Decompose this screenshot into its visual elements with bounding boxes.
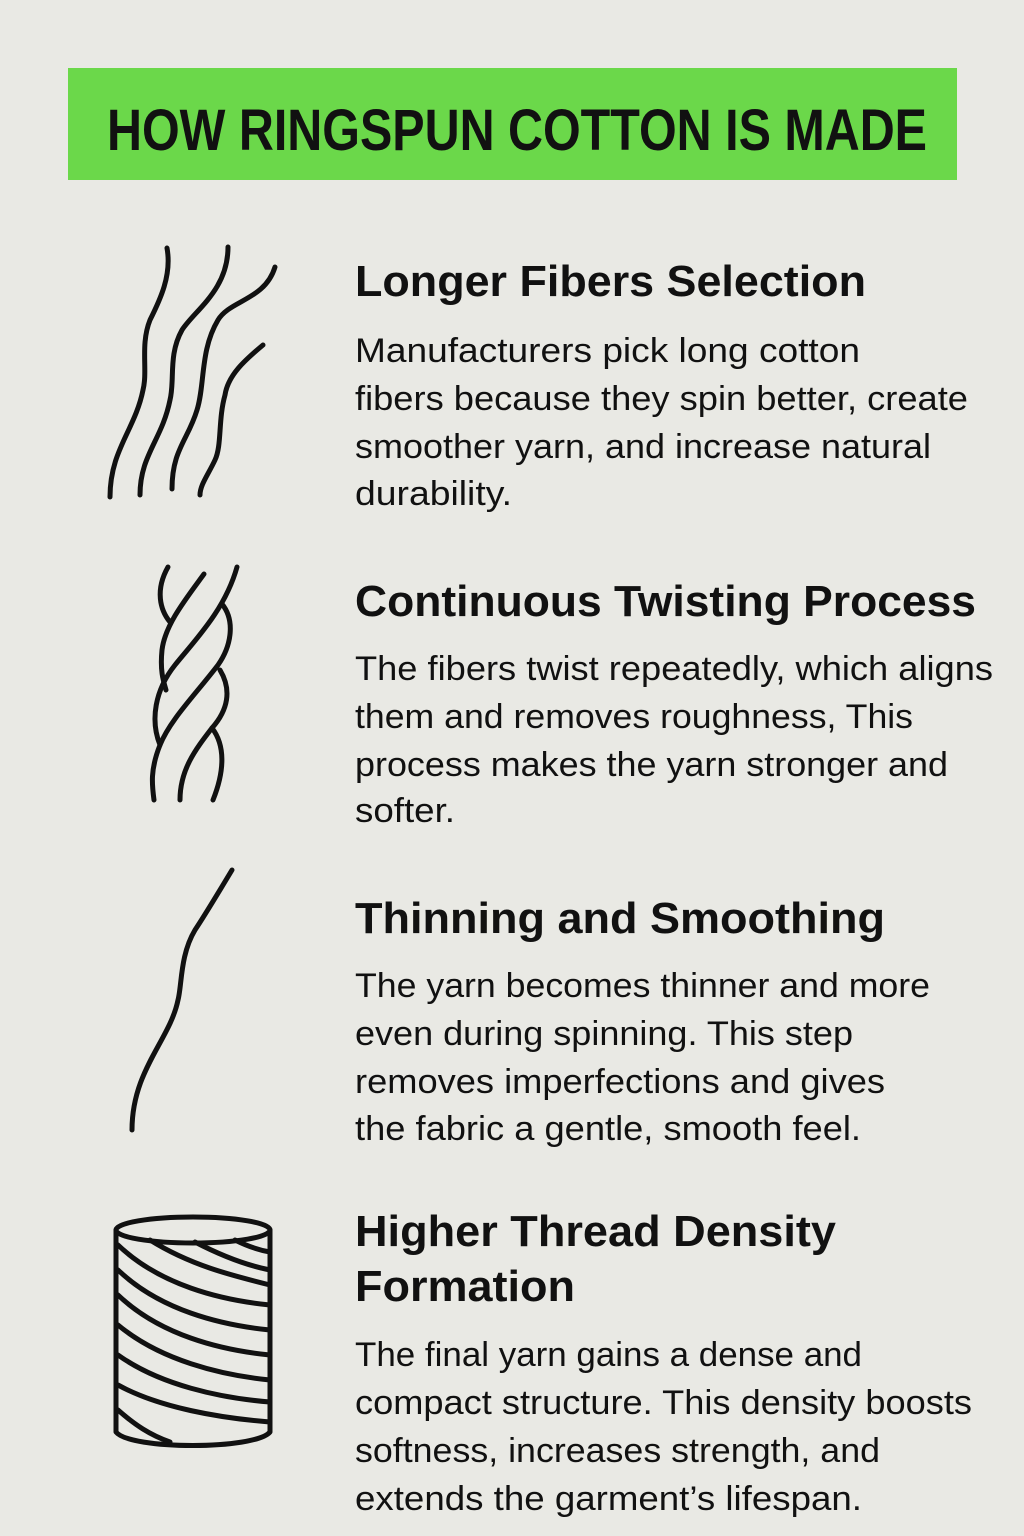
section 4: higher thread density formation [355,1207,972,1518]
section 3: thinning and smoothing: removes imperfections and gives [355,1063,885,1101]
section 4: higher thread density formation: softness, increases strength, and [355,1432,880,1470]
section 2: continuous twisting process: softer. [355,792,455,830]
icon: long fibers [110,247,275,497]
section 3: thinning and smoothing: Thinning and Smoothing [355,894,885,943]
section 2: continuous twisting process: Continuous Twisting Process [355,577,976,626]
section 1: longer fibers selection: fibers because they spin better, create [355,380,968,418]
section 2: continuous twisting process: The fibers twist repeatedly, which aligns [355,650,993,688]
icon: thin yarn [132,870,232,1130]
section 4: higher thread density formation: Higher Thread Density [355,1207,837,1256]
section 3: thinning and smoothing: the fabric a gentle, smooth feel. [355,1110,861,1148]
section 4: higher thread density formation: Formation [355,1262,575,1311]
section 2: continuous twisting process [355,577,993,830]
section 1: longer fibers selection: Manufacturers pick long cotton [355,332,860,370]
section 3: thinning and smoothing: even during spinning. This step [355,1015,853,1053]
section 1: longer fibers selection: smoother yarn, and increase natural [355,428,931,466]
section 2: continuous twisting process: them and removes roughness, This [355,698,913,736]
section 1: longer fibers selection: durability. [355,475,512,513]
section 4: higher thread density formation: The final yarn gains a dense and [355,1336,862,1374]
section 3: thinning and smoothing: The yarn becomes thinner and more [355,967,930,1005]
icon: twisted strands [152,567,237,800]
icon: yarn spool [116,1217,270,1446]
section 1: longer fibers selection [355,257,968,513]
title banner [68,68,957,180]
section 3: thinning and smoothing [355,894,930,1148]
section 2: continuous twisting process: process makes the yarn stronger and [355,746,948,784]
section 4: higher thread density formation: extends the garment’s lifespan. [355,1480,862,1518]
section 1: longer fibers selection: Longer Fibers Selection [355,257,866,306]
section 4: higher thread density formation: compact structure. This density boosts [355,1384,972,1422]
